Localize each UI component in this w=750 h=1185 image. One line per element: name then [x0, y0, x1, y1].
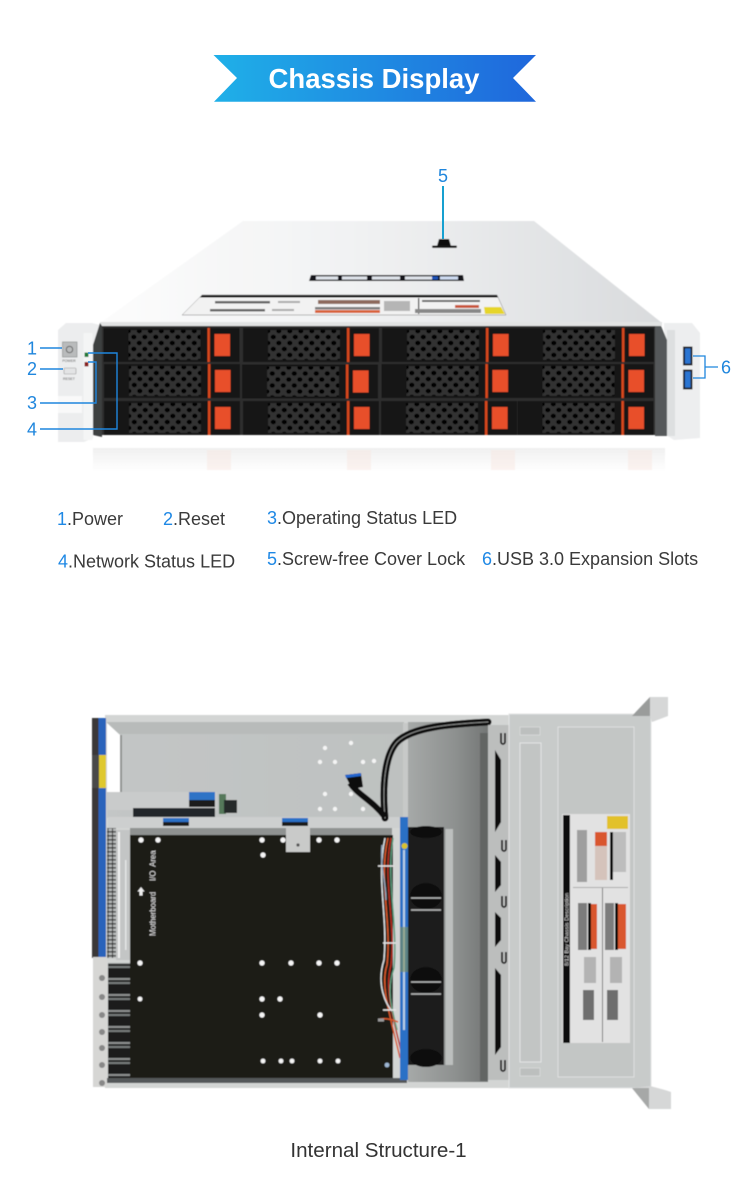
cover sticker: [562, 814, 630, 1043]
drive bay tray r1c2: [243, 328, 379, 362]
drive bay tray r3c3: [381, 401, 517, 435]
chassis back rim: [105, 715, 510, 1088]
left rail vents: [107, 828, 130, 1081]
drive bay tray r2c1: [104, 364, 240, 398]
chassis top cover: [100, 221, 662, 323]
drive bay tray r3c2: [243, 401, 379, 435]
power button: POWER: [62, 359, 76, 363]
fan assembly: [408, 826, 453, 1067]
reset button: RESET: [63, 377, 76, 381]
callout 1: [27, 338, 62, 358]
callout 4: 4: [27, 420, 37, 440]
service sticker on cover: [182, 295, 506, 315]
front panel: [101, 326, 655, 435]
right bezel: [655, 326, 667, 436]
cross bar: [108, 817, 401, 852]
drive cage bracket: [108, 792, 237, 817]
wire loom: [378, 838, 402, 1058]
callout 6: [693, 356, 731, 378]
drive bay tray r1c4: [518, 328, 654, 362]
callout 2: 2: [27, 359, 37, 379]
motherboard tray: [130, 835, 393, 1078]
lower rear strip with screws: [93, 957, 107, 1087]
post: [403, 723, 408, 818]
bottom right mounting ear: [632, 1086, 671, 1109]
callout 1: 1: [27, 338, 37, 358]
drive bay tray r3c1: [104, 401, 240, 435]
drive bay tray r2c2: [242, 364, 378, 398]
top cover front edge: [100, 322, 662, 326]
front bay cover plate: [509, 714, 651, 1088]
legend item 2: 2.Reset: [163, 509, 225, 529]
drive backplane rail: [480, 725, 509, 1081]
top right mounting ear: [632, 697, 668, 722]
fan bay cavity: [408, 722, 488, 1082]
callout 6: 6: [721, 358, 731, 378]
model label strip: [309, 275, 464, 281]
upper bay floor: [107, 722, 404, 818]
open window: [107, 723, 120, 792]
USB port upper: [683, 346, 692, 366]
reflection below chassis: [93, 448, 665, 472]
mounting holes in upper bay: [318, 741, 376, 811]
legend item 3: 3.Operating Status LED: [267, 508, 457, 528]
red LED: [84, 362, 88, 366]
legend item 1: 1.Power: [57, 509, 123, 529]
callout 2: [27, 359, 63, 379]
legend item 5: 5.Screw-free Cover Lock: [267, 549, 466, 569]
rear blue and black edge: [92, 718, 106, 958]
right USB ear: [655, 323, 700, 440]
tray marking arrow: [138, 887, 144, 896]
callout 5: 5: [438, 166, 448, 186]
callout 4: [27, 353, 117, 440]
left control ear: [58, 323, 102, 442]
drive bay tray r2c4: [518, 364, 654, 398]
cover lock latch: [432, 239, 457, 248]
green LED: [84, 352, 88, 357]
legend item 6: 6.USB 3.0 Expansion Slots: [482, 549, 698, 569]
callout 5: [438, 166, 448, 239]
left bezel: [93, 323, 102, 437]
tray marking text: Motherboard: [148, 892, 158, 936]
callout 3: 3: [27, 393, 37, 413]
fan wall PCB strip: [400, 817, 408, 1080]
drive bay tray r2c3: [382, 364, 518, 398]
top cable bundle: [384, 722, 488, 818]
USB port lower: [683, 370, 692, 390]
tray marking text: I/O Area: [148, 850, 158, 881]
drive bay tray r3c4: [518, 401, 654, 435]
callout 3: [27, 362, 96, 413]
legend: [57, 508, 698, 572]
drive bay tray r1c3: [382, 328, 518, 362]
drive bay tray r1c1: [104, 328, 240, 362]
front chassis photo: [58, 221, 700, 472]
title banner: [214, 55, 536, 102]
legend item 4: 4.Network Status LED: [58, 552, 235, 572]
internal structure photo: [92, 697, 671, 1109]
caption: Internal Structure-1: [290, 1139, 467, 1162]
motherboard standoff holes: [137, 837, 389, 1067]
sticker vertical title: 8/12 Bay Chassis Description: [564, 893, 570, 966]
title: Chassis Display: [269, 63, 480, 94]
lower floor edge: [107, 1078, 407, 1083]
USB header cable: [345, 773, 385, 817]
